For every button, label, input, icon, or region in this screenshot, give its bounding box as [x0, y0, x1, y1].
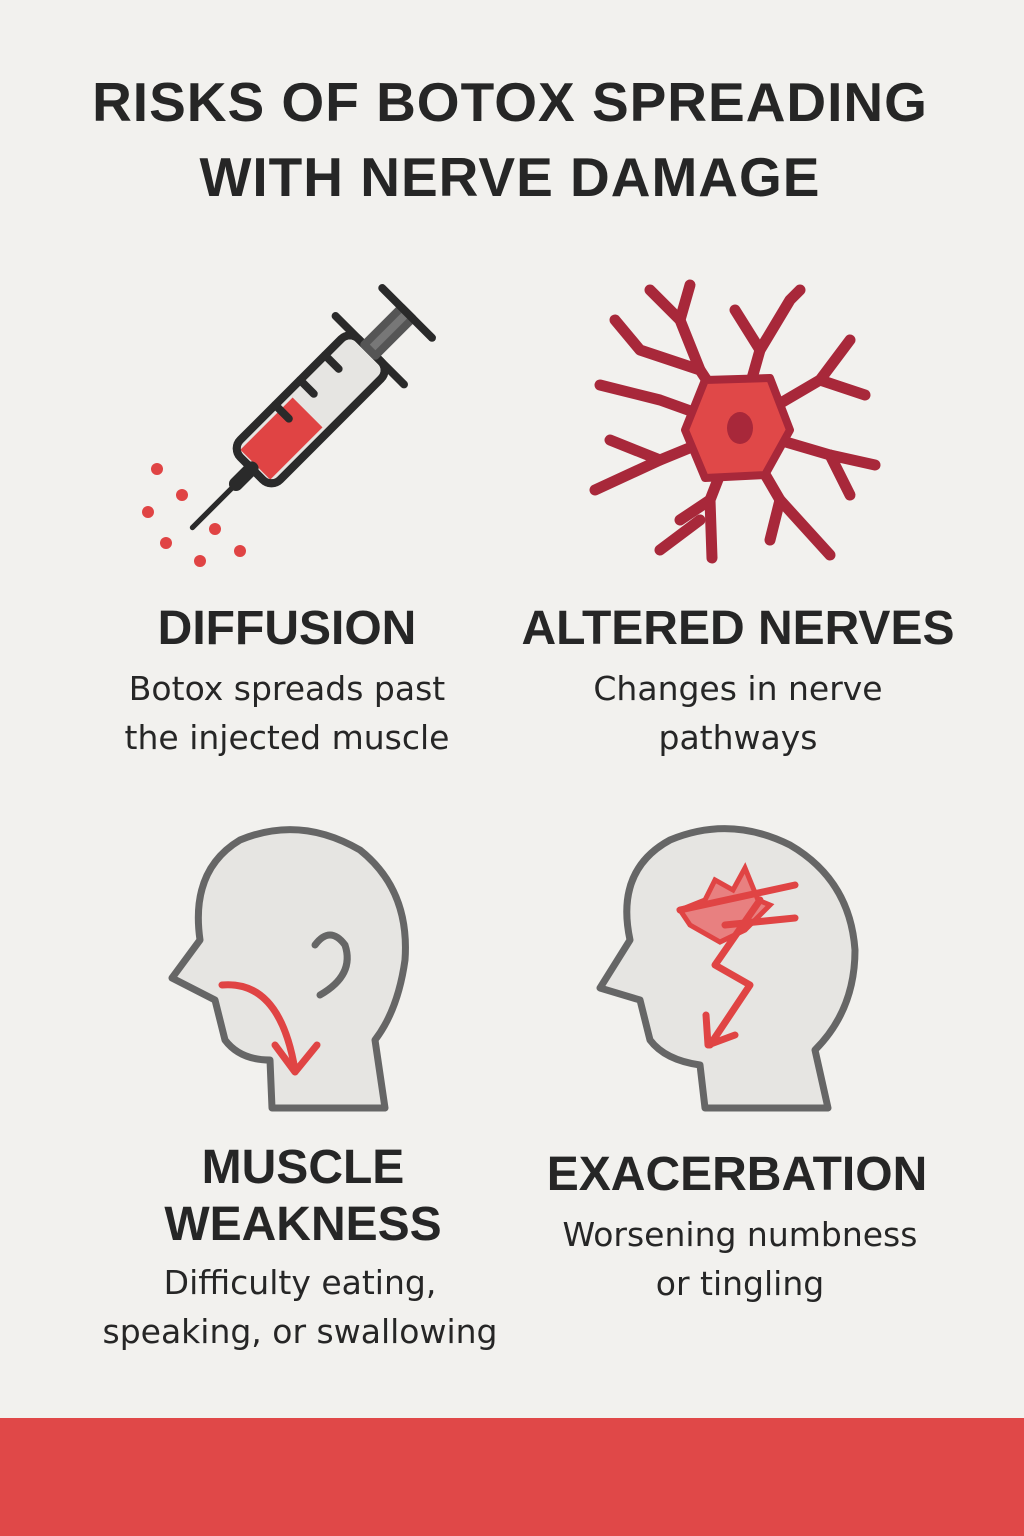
heading: diffusion	[125, 602, 449, 757]
icon: head muscle weakness	[172, 830, 405, 1108]
heading: exacerbation: Worsening numbness	[563, 1215, 917, 1254]
heading: muscle weakness: WEAKNESS	[164, 1198, 442, 1251]
heading: diffusion: the injected muscle	[125, 718, 449, 757]
icon: neuron	[595, 285, 875, 558]
heading: exacerbation	[547, 1148, 927, 1303]
footer band	[0, 1418, 1024, 1536]
icon: syringe	[158, 279, 441, 562]
heading: diffusion: DIFFUSION	[158, 602, 416, 655]
heading: altered nerves: Changes in nerve	[593, 669, 883, 708]
heading: exacerbation: or tingling	[656, 1264, 824, 1303]
icon: diffusion droplets	[142, 463, 246, 567]
title: RISKS OF BOTOX SPREADING	[92, 71, 928, 133]
heading: muscle weakness: speaking, or swallowing	[102, 1312, 498, 1351]
heading: muscle weakness: Difficulty eating,	[164, 1263, 436, 1302]
title: WITH NERVE DAMAGE	[199, 146, 821, 208]
heading: altered nerves: ALTERED NERVES	[522, 602, 954, 655]
heading: diffusion: Botox spreads past	[129, 669, 445, 708]
heading: altered nerves	[522, 602, 954, 757]
icon: head exacerbation	[600, 829, 855, 1108]
heading: altered nerves: pathways	[659, 718, 817, 757]
heading: muscle weakness	[102, 1141, 498, 1351]
heading: muscle weakness: MUSCLE	[202, 1141, 404, 1194]
heading: exacerbation: EXACERBATION	[547, 1148, 927, 1201]
title	[92, 71, 928, 208]
